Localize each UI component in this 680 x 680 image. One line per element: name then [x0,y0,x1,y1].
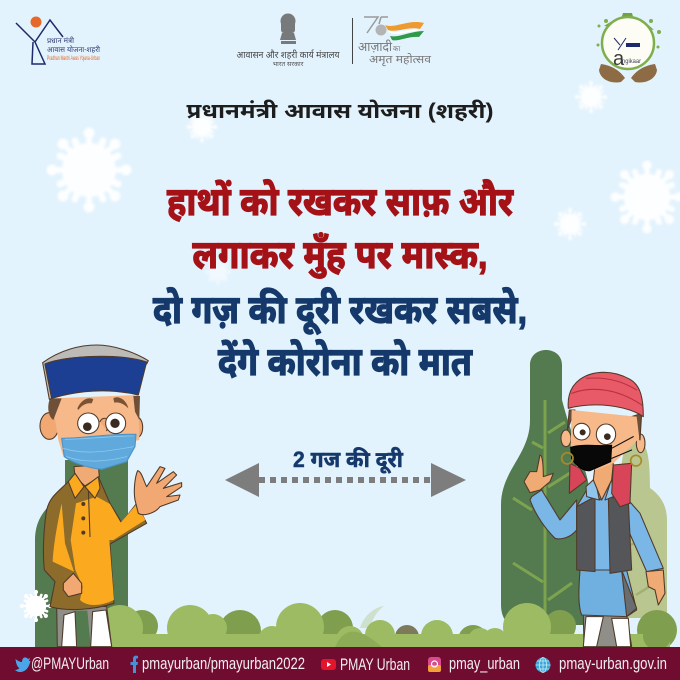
earrings [562,453,573,464]
character: man in blue cap [40,345,182,647]
right hand [646,570,665,605]
eyes [78,413,99,434]
green skyline and leaves [604,13,654,30]
footer band: pmayurban/pmayurban2022 [142,654,305,673]
footer band: pmay_urban [449,654,520,673]
character: woman with red headscarf [524,372,665,647]
pointing hand [524,455,553,493]
neck [593,463,613,500]
logo: Pradhan Mantri Awas Yojana Urban [16,16,100,64]
hair [567,410,642,440]
neck [74,465,99,486]
waving hand [134,467,182,515]
headline [153,180,527,384]
lower hand [63,573,82,597]
icon: national emblem [280,14,296,44]
kurta base [43,477,147,610]
subtitle: प्रधानमंत्री आवास योजना (शहरी) [186,99,493,123]
logo: Pradhan Mantri Awas Yojana Urban: Pradhan Mantri Awas Yojana-Urban [47,55,100,62]
headline: दो गज़ की दूरी रखकर सबसे, [153,288,527,335]
ears [40,413,59,439]
tree: left [35,460,128,647]
headline: हाथों को रखकर साफ़ और [167,180,514,224]
logo: Pradhan Mantri Awas Yojana Urban: प्रधान मंत्री [47,37,74,45]
sleeve [53,503,74,572]
cap [43,345,148,399]
trees: right [501,350,667,625]
logo: ministry emblem and name: भारत सरकार [273,61,304,68]
kurta front [71,497,145,605]
hands [599,64,657,82]
logo: Angikaar: ngikaar [622,59,641,65]
eyes [573,423,590,440]
buttons [88,488,90,537]
icon: twitter [15,657,30,672]
left arm [530,490,577,539]
logo: Azadi ka Amrit Mahotsav [358,17,432,66]
collar [68,473,100,498]
bushes [80,603,677,655]
black mask [571,445,612,471]
footer band: PMAY Urban [340,655,410,674]
blue mask [62,434,136,469]
face [571,410,639,470]
decorative virus shapes [46,81,680,285]
logo: ministry emblem and name [236,14,340,68]
logo: Azadi ka Amrit Mahotsav: आज़ादी [358,39,393,54]
logo: ministry emblem and name: आवासन और शहरी कार्य मंत्रालय [236,49,340,61]
blue kurta [579,570,637,617]
logo: Azadi ka Amrit Mahotsav: अमृत महोत्सव [369,53,432,66]
footer band [0,647,680,680]
hair [48,396,140,420]
red hair cloth [569,463,632,507]
distance arrow: 2 गज की दूरी [293,447,404,474]
icon: facebook [130,656,138,673]
collar [586,478,613,500]
nose [100,418,108,431]
face [52,395,139,457]
icon: youtube [321,659,336,670]
logo: Pradhan Mantri Awas Yojana Urban: आवास योजना-शहरी [47,46,100,54]
footer band: @PMAYUrban [31,654,109,673]
icon: instagram [428,657,441,672]
icon: 75 with flag [364,17,424,40]
divider [352,18,353,64]
logo: Angikaar: a [613,48,625,70]
legs [57,603,112,647]
ears [561,430,571,447]
logo: Angikaar [596,13,661,82]
virus shape over left tree [20,590,52,622]
icon: globe [536,658,550,672]
eyebrows [77,397,128,410]
vest [577,497,632,573]
logo: Azadi ka Amrit Mahotsav: का [393,46,400,53]
legs [583,615,632,647]
headline: लगाकर मुँह पर मास्क, [192,233,488,279]
distance arrow [225,447,466,497]
red headscarf [568,372,643,417]
shirt [577,480,630,570]
headline: देंगे कोरोना को मात [218,340,473,384]
right arm [627,500,663,572]
